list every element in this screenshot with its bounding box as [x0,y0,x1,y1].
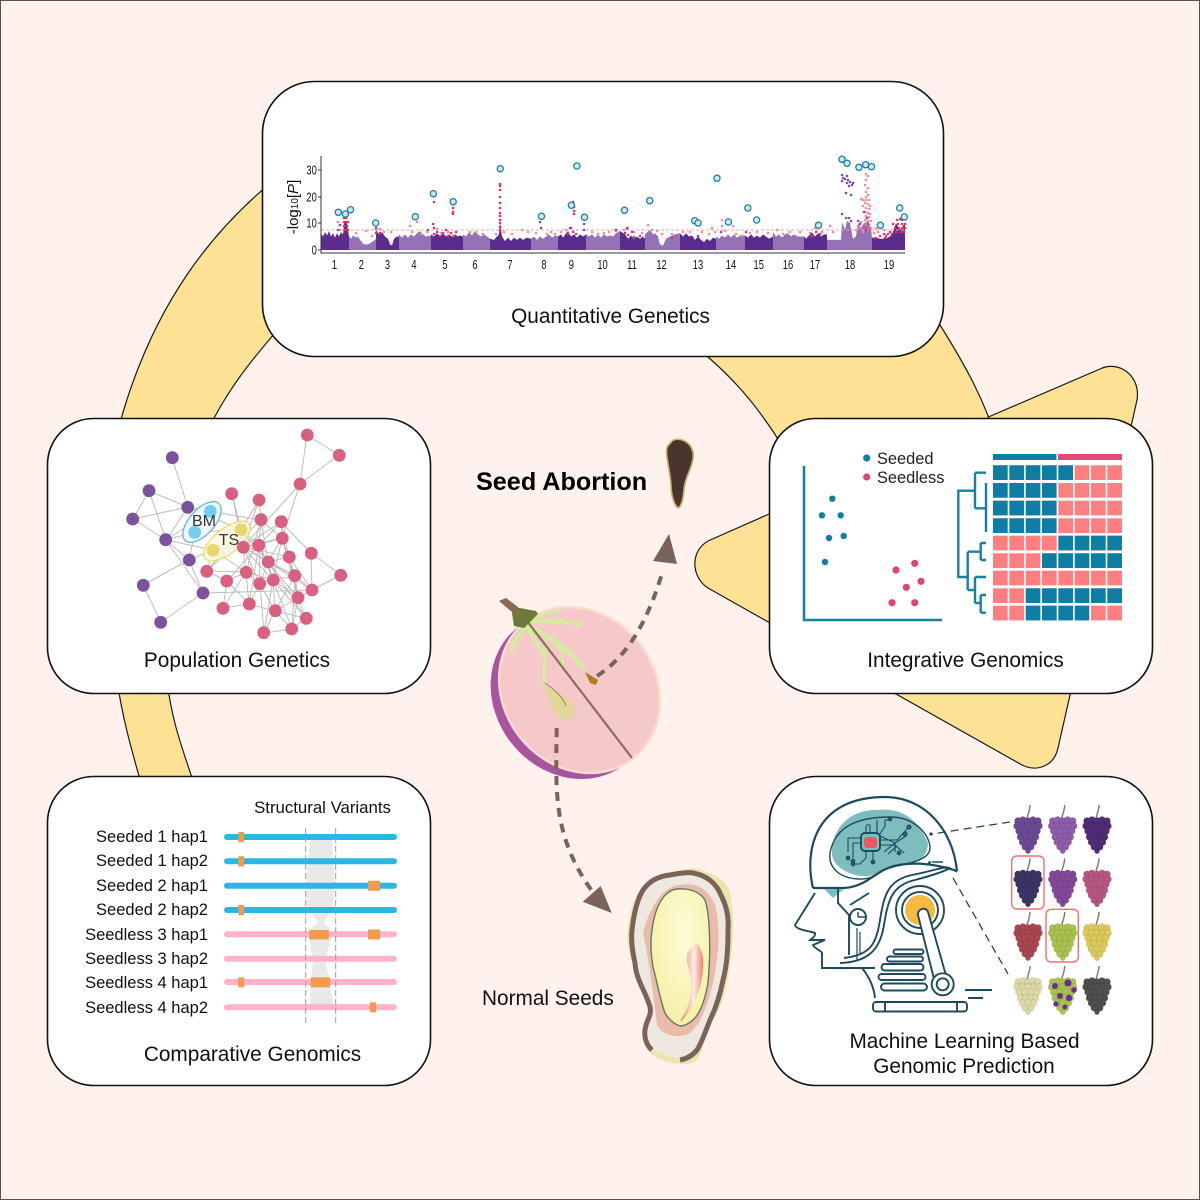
chromosome labels: 18 [845,259,855,272]
y axis title: -log10[P] [285,180,302,234]
arrow to seed abortion [597,534,677,676]
heading: Quantitative Genetics [511,305,710,328]
y axis labels [306,164,317,258]
group TS ellipse [197,514,257,568]
panel: integrative genomics [770,418,1152,694]
helmet lower edge [813,864,957,888]
inner seed [544,682,575,719]
chromosome labels: 4 [411,259,417,272]
haplotype labels: Seeded 1 hap1 [96,828,208,846]
joint [896,886,944,934]
robot head [795,797,992,1012]
heading line 2: Genomic Prediction [873,1055,1055,1078]
helmet dome [810,797,957,888]
y axis labels: 20 [306,191,317,205]
face profile [795,893,833,968]
chromosome labels: 6 [472,259,478,272]
purple mottling [1052,980,1077,1009]
haplotype labels: Seedless 4 hap2 [85,999,208,1017]
dendrogram [958,473,986,613]
chromosome labels: 19 [884,259,894,272]
cheek wiring [857,928,860,960]
significant loci [335,156,907,228]
heading: Machine Learning Based [849,1030,1080,1053]
cycle ring: upper left arc [118,160,300,430]
brain outline [830,817,930,879]
synteny band [306,838,335,1005]
legend [863,450,944,487]
chromosome labels: 5 [442,259,448,272]
seedless haplotype bars [227,934,394,1007]
chromosome labels: 15 [754,259,764,272]
motion lines [965,990,992,998]
haplotype labels: Seeded 2 hap2 [96,901,208,919]
haplotype labels: Seeded 2 hap1 [96,877,208,895]
axes [318,156,905,253]
structural variants heading: Structural Variants [254,798,391,817]
manhattan bars light [349,221,872,250]
chromosome labels: 11 [627,259,637,272]
vents [894,950,924,954]
boundary dashes [306,828,336,1023]
skin highlight [502,632,517,715]
purple snps [338,175,860,236]
cycle ring: lower left arc [117,680,196,790]
cell gaps [1008,464,1106,621]
legend: Seedless [877,469,944,487]
pink nodes [200,429,347,639]
haplotype labels: Seedless 3 hap2 [85,950,208,968]
base [873,1002,967,1012]
blue nodes [188,505,217,539]
chromosome labels: 14 [726,259,736,272]
gauge [850,909,866,925]
seedless points [888,560,925,606]
panel: quantitative genetics [262,82,944,356]
y axis labels: 10 [306,217,317,231]
chromosome labels: 10 [597,259,608,272]
purple nodes [126,451,209,629]
legend: Seeded [877,450,934,468]
stem [512,607,538,628]
haplotype labels: Seedless 4 hap1 [85,974,208,992]
aborted ovule [585,672,598,685]
icon: normal seed [627,868,733,1064]
center axis [527,621,632,758]
heading: Population Genetics [144,649,330,672]
chromosome labels: 7 [507,259,513,272]
y axis labels: 0 [312,244,317,258]
haplotype labels: Seeded 1 hap2 [96,852,208,870]
grape flesh [466,575,693,805]
heading: Comparative Genomics [144,1043,361,1066]
chromosome labels [332,259,894,272]
haplotype labels [85,828,208,1017]
heatmap [958,454,1122,621]
heading: normal seeds: Normal Seeds [482,987,614,1010]
yellow nodes [207,523,247,557]
haplotype labels: Seedless 3 hap1 [85,926,208,944]
chromosome labels: 17 [810,259,820,272]
dashed zoom lines [932,822,1010,974]
arrow to normal seeds [556,728,612,913]
chromosome labels: 1 [332,259,337,272]
arm [918,909,947,983]
neck lines [838,888,875,998]
jaw [822,868,950,968]
network graph [126,429,347,639]
heading: seed abortion: Seed Abortion [476,468,647,496]
chromosome labels: 9 [569,259,574,272]
panel: machine learning genomic prediction [770,776,1152,1086]
label TS: TS [219,532,239,549]
orange variant blocks [238,832,380,1012]
y axis labels: 30 [306,164,317,178]
grape skin [458,581,684,811]
label BM: BM [192,513,216,530]
chromosome labels: 16 [783,259,793,272]
chromosome labels: 2 [359,259,364,272]
threshold line [321,229,905,231]
group bars [993,454,1056,460]
scatter axes [804,466,942,620]
circuit chip [847,818,911,865]
heading: Integrative Genomics [867,649,1064,672]
helmet details [932,862,957,872]
selection frames [1012,856,1078,962]
network edges [133,435,341,633]
chromosome labels: 13 [693,259,703,272]
chromosome labels: 8 [541,259,547,272]
manhattan plot [285,156,907,272]
visor [824,889,844,898]
ring overlap fill [780,410,1000,520]
cycle ring: right arc [680,300,1000,450]
cells: salmon base [993,465,1122,620]
grape bunches [1014,805,1112,1015]
icon: aborted seed [667,439,693,508]
teal brain [832,810,928,876]
seeded points [819,496,847,565]
cells: blue [993,465,1122,620]
grape cross-section [458,575,693,811]
panel: comparative genomics [48,776,430,1086]
panel: population genetics [48,418,430,694]
red snps [344,184,905,238]
vascular veins [512,611,583,683]
seeded haplotype bars [227,837,394,910]
cycle ring: arrowhead [695,366,1137,768]
group BM ellipse [176,495,228,549]
chromosome labels: 3 [385,259,390,272]
pink snps [338,174,884,236]
chromosome labels: 12 [656,259,667,272]
dot pointers [928,832,933,864]
manhattan bars dark [321,222,905,250]
scatter plot [804,450,944,620]
